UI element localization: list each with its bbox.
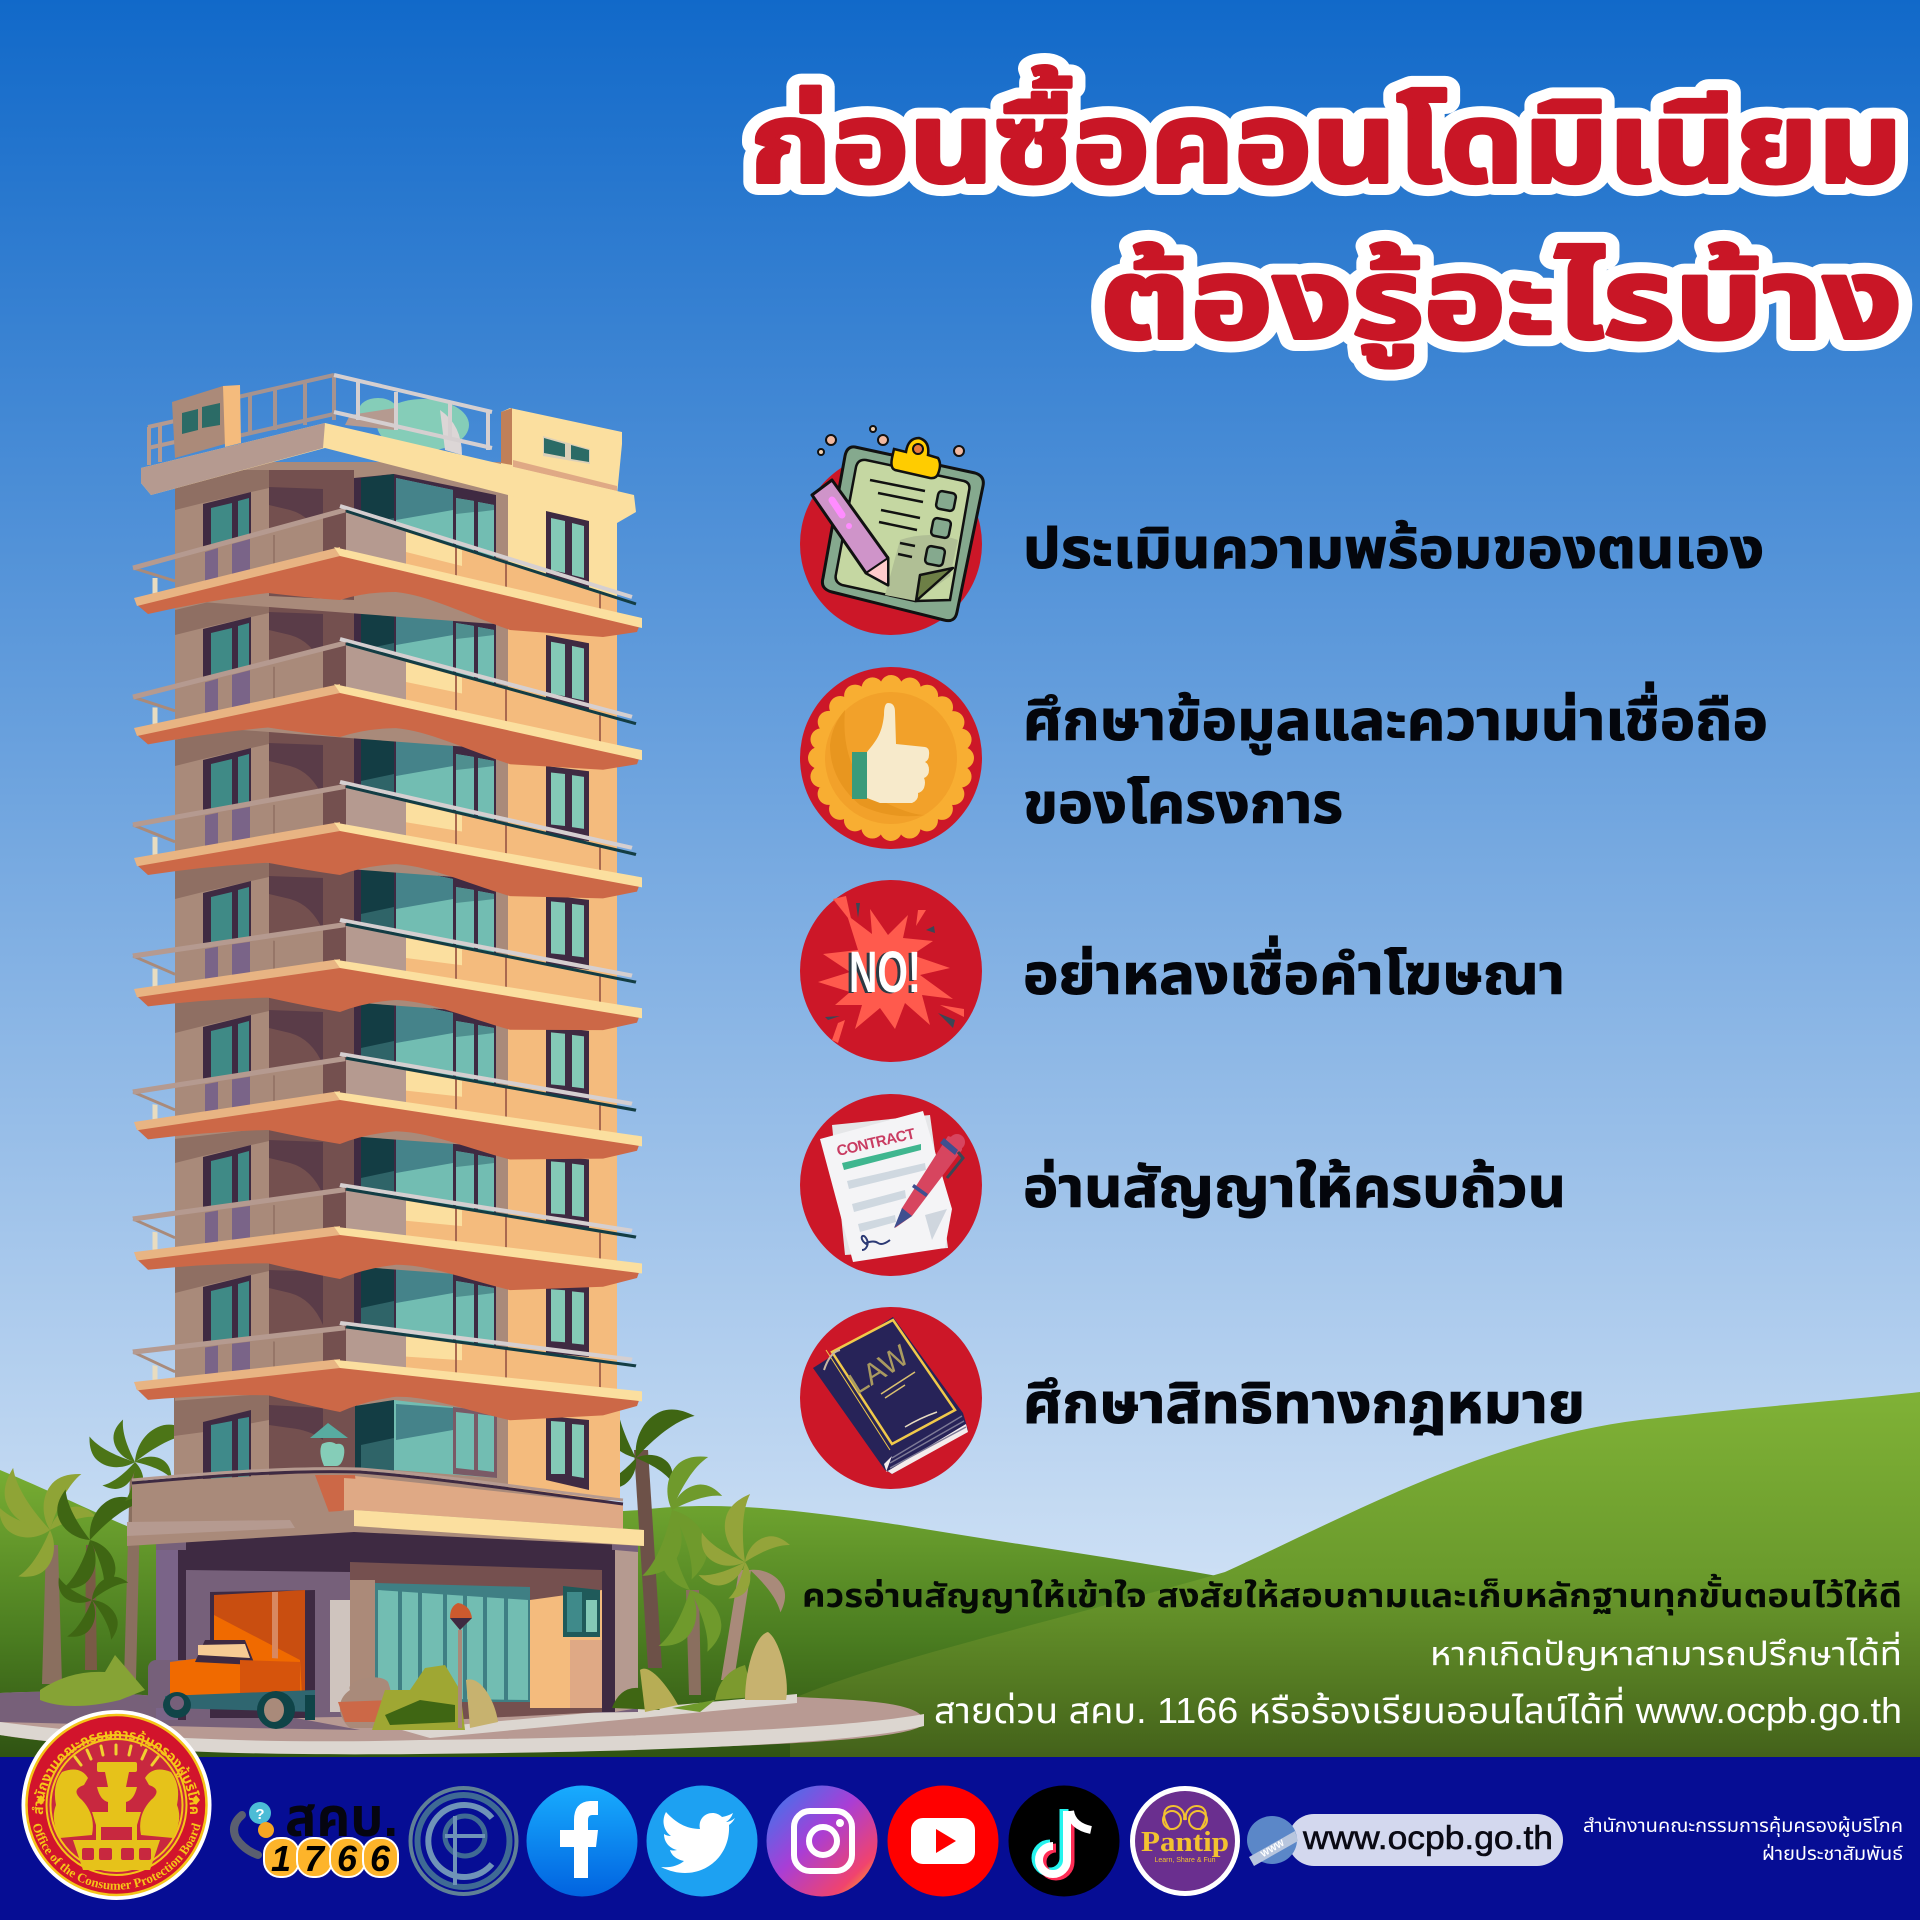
ground floor: [156, 1530, 638, 1725]
logo: hotline 1766: 1: [271, 1838, 291, 1879]
icon: twitter: [646, 1786, 758, 1896]
floor 4: [133, 851, 642, 1049]
icon: consumer protection board seal: Office of the Consumer Protection Board: [33, 1822, 201, 1890]
text: agency credit: [1583, 1814, 1903, 1865]
title: ต้องรู้อะไรบ้าง: [1100, 237, 1902, 368]
text: step 2: ศึกษาข้อมูลและความน่าเชื่อถือ: [1023, 681, 1768, 755]
front plants and urn: [338, 1603, 715, 1730]
text: step 2: [1023, 681, 1768, 835]
text: step 5: ศึกษาสิทธิทางกฎหมาย: [1023, 1372, 1585, 1435]
logo: hotline 1766: 6: [370, 1838, 391, 1879]
website pill: www.ocpb.go.th: [1302, 1819, 1553, 1856]
hills: [0, 1392, 1920, 1760]
logo: pantip: Learn, Share & Fun: [1154, 1857, 1216, 1864]
title: ต้องรู้อะไรบ้าง: [1100, 237, 1902, 368]
icon: law book: [800, 1307, 982, 1489]
icon: law book: LAW: [843, 1339, 915, 1401]
icon: no starburst: NO!: [846, 941, 918, 1006]
text: hotline line: สายด่วน สคบ. 1166 หรือร้องเรียนออนไลน์ได้ที่ www.ocpb.go.th: [934, 1686, 1902, 1731]
floor 7: [133, 1245, 642, 1450]
text: agency credit: ฝ่ายประชาสัมพันธ์: [1762, 1843, 1903, 1865]
floor 5: [133, 985, 642, 1182]
text: agency credit: สำนักงานคณะกรรมการคุ้มครองผู้บริโภค: [1583, 1814, 1903, 1838]
logo: CPB emblem: [410, 1788, 516, 1894]
icon: instagram: [766, 1786, 878, 1896]
website pill: WWW: [1259, 1837, 1286, 1859]
lowest upper floor with balcony: [127, 1393, 644, 1546]
text: step 3: อย่าหลงเชื่อคำโฆษณา: [1023, 935, 1565, 1006]
logo: hotline 1766: 7: [304, 1838, 326, 1879]
icon: no starburst: NO!: [849, 940, 921, 1005]
footer bar: [0, 1757, 1920, 1920]
icon: consumer protection board seal: [22, 1710, 212, 1900]
title: ก่อนซื้อคอนโดมิเนียม: [750, 65, 1902, 206]
title: [750, 65, 1902, 368]
building: [127, 375, 644, 1729]
text: advice line: ควรอ่านสัญญาให้เข้าใจ สงสัยให้สอบถามและเก็บหลักฐานทุกขั้นตอนไว้ให้ดี: [802, 1573, 1902, 1616]
text: step 2: ของโครงการ: [1023, 772, 1343, 835]
floor 1: [133, 462, 642, 637]
icon: thumbs up badge: [800, 667, 982, 849]
text: step 1: ประเมินความพร้อมของตนเอง: [1023, 517, 1764, 580]
truck: [148, 1640, 315, 1729]
icon: consumer protection board seal: สำนักงานคณะกรรมการคุ้มครองผู้บริโภค: [32, 1730, 200, 1814]
text: help line: หากเกิดปัญหาสามารถปรึกษาได้ที่: [1430, 1631, 1902, 1672]
icon: contract and pen: CONTRACT: [835, 1125, 917, 1160]
logo: pantip: Pantip: [1141, 1826, 1229, 1858]
rooftop: [141, 375, 636, 523]
icon: no starburst: [800, 880, 982, 1062]
lantern: [310, 1423, 348, 1466]
floor 3: [133, 718, 642, 912]
icon: contract and pen: [800, 1094, 982, 1276]
title: ก่อนซื้อคอนโดมิเนียม: [750, 65, 1902, 206]
logo: hotline 1766: 6: [337, 1838, 358, 1879]
text: step 4: อ่านสัญญาให้ครบถ้วน: [1023, 1156, 1566, 1219]
icon: youtube: [888, 1786, 998, 1896]
icon: tiktok: [1008, 1786, 1120, 1896]
logo: pantip: [1130, 1786, 1240, 1896]
floor 2: [133, 587, 642, 774]
driveway: [0, 1692, 924, 1754]
floor 6: [133, 1115, 642, 1317]
logo: hotline 1766: สคบ.: [285, 1788, 398, 1848]
logo: hotline 1766: [234, 1788, 398, 1879]
icon: facebook: [526, 1786, 638, 1896]
website pill: [1247, 1814, 1563, 1866]
left palm trees: [0, 1414, 193, 1706]
logo: hotline 1766: ?: [255, 1806, 265, 1823]
right palm trees: [591, 1388, 795, 1700]
icon: clipboard checklist: [800, 426, 983, 635]
